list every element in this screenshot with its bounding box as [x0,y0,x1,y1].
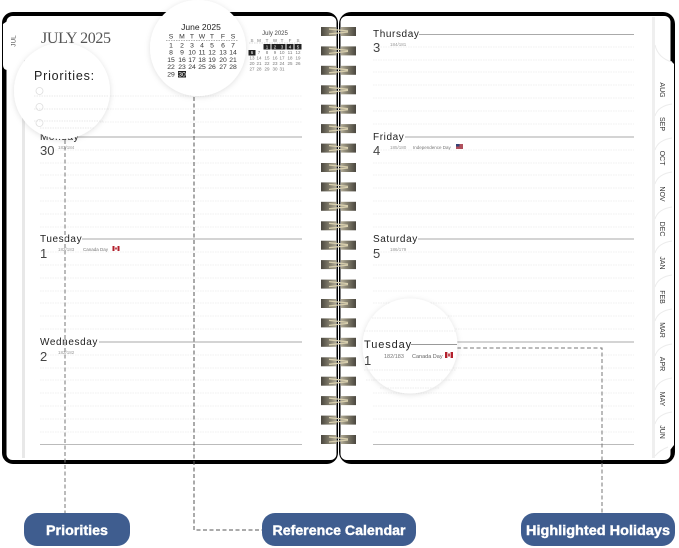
callout circle: June 2025 calendar: 8 [169,50,173,56]
day: Wednesday 2: 2 [40,349,47,364]
reference calendar: July 2025: 21 [256,61,262,66]
day: Friday 4: Friday [373,132,404,143]
label pill: Priorities [24,513,130,546]
month index tabs: APR [658,357,665,371]
reference calendar: July 2025: 15 [264,56,270,60]
callout circle: June 2025 calendar: 25 [198,64,206,71]
reference calendar: July 2025 [248,31,302,72]
month index tabs: DEC [658,222,665,236]
reference calendar: July 2025: 17 [279,56,285,60]
callout circle: June 2025 calendar: S [231,34,236,40]
connector: reference calendar [194,97,262,530]
callout circle: June 2025 calendar: W [199,34,206,40]
reference calendar: July 2025: 2 [274,44,277,50]
reference calendar: July 2025: 24 [279,61,285,66]
day: Monday 30: Monday [40,132,79,143]
day: Friday 4: 185/180 [390,145,407,150]
day: Tuesday 1: Tuesday [40,234,82,245]
day: Saturday 5: Saturday [373,234,418,245]
callout circle: June 2025 calendar: 12 [208,50,216,56]
day: Friday 4 [373,132,634,158]
day: Monday 30: 183/184 [58,145,75,150]
reference calendar: July 2025: T [281,38,284,43]
reference calendar: July 2025: 29 [264,66,270,72]
reference calendar: July 2025: M [257,38,261,43]
callout circle: June 2025 calendar: 7 [231,42,235,50]
reference calendar: July 2025: 16 [272,56,278,60]
reference calendar: July 2025: 11 [288,50,293,55]
callout circle: June 2025 calendar: 11 [198,50,206,56]
month index tabs: JAN [658,256,665,270]
callout circle: June 2025 calendar: 17 [188,57,196,64]
month tab: JUL [3,16,24,70]
callout circle: June 2025 calendar: 15 [167,57,175,64]
callout circle: June 2025 calendar: 22 [167,64,175,71]
reference calendar: July 2025: 18 [287,56,293,60]
ruled lines: left page [40,96,302,432]
day: Friday 4: 4 [373,143,380,158]
callout circle: June 2025 calendar: 9 [180,50,184,56]
callout circle: June 2025 calendar: 24 [188,64,196,71]
label pill: Priorities: Priorities [46,522,108,538]
day: Saturday 5: 5 [373,246,380,261]
callout circle: June 2025 calendar: F [221,34,225,40]
bottom rule: right page [373,444,634,446]
reference calendar: July 2025: 3 [281,44,284,50]
reference calendar: July 2025: 14 [256,56,262,60]
callout circle: June 2025 calendar: 27 [219,64,227,71]
callout circle: June 2025 calendar: 10 [188,50,196,56]
callout circle: priorities: Priorities: [34,69,95,83]
day: Tuesday 1: 1 [40,246,47,261]
month index tabs: MAY [658,392,665,407]
label pill: Reference Calendar: Reference Calendar [272,522,406,538]
month index tabs: SEP [658,117,665,131]
reference calendar: July 2025: 6 [251,50,254,55]
label pill: Highlighted Holidays: Highlighted Holidays [526,522,670,538]
month index tabs: AUG [658,82,665,98]
day: Tuesday 1 [40,234,302,261]
callout circle: June 2025 calendar: 16 [178,57,186,64]
callout circle: June 2025 calendar: 28 [229,64,237,71]
day: Wednesday 2 [40,337,302,364]
reference calendar: July 2025: 7 [258,50,261,55]
callout circle: June 2025 calendar: T [210,34,214,40]
left page [2,12,338,464]
callout circle: Canada Day holiday: 182/183 [384,354,404,360]
day: Saturday 5: 186/179 [390,247,407,252]
day: Thursday 3 [373,29,634,55]
reference calendar: July 2025: 25 [287,61,293,66]
day: Wednesday 2: Wednesday [40,337,98,348]
reference calendar: July 2025: 31 [279,66,285,72]
reference calendar: July 2025: 8 [266,50,269,55]
reference calendar: July 2025: F [289,38,292,43]
reference calendar: July 2025: 5 [297,44,300,50]
reference calendar: July 2025: 9 [274,50,277,55]
callout circle: Canada Day holiday [362,298,458,394]
callout circle: June 2025 calendar: 20 [219,57,227,64]
month index tabs: MAR [658,322,665,338]
reference calendar: July 2025: 19 [295,56,301,60]
callout circle: priorities [14,43,110,139]
callout circle: June 2025 calendar: 13 [219,50,227,56]
reference calendar: July 2025: 1 [266,44,269,50]
callout circle: June 2025 calendar: M [179,34,185,40]
callout circle: June 2025 calendar: T [190,34,194,40]
reference calendar: July 2025: W [273,38,278,43]
reference calendar: July 2025: 23 [272,61,278,66]
day rule: bottom right section [440,341,634,343]
label pill: Highlighted Holidays [521,513,675,546]
bottom rule: left page [40,444,302,446]
callout circle: June 2025 calendar: 29 [167,72,175,78]
connector: priorities [64,140,66,513]
connector: highlighted holidays [457,348,602,513]
ruled lines: right page [373,47,634,432]
reference calendar: July 2025: 12 [295,50,301,55]
day: Wednesday 2: 182/182 [58,350,75,355]
day: Tuesday 1: Canada Day [83,247,109,252]
callout circle: June 2025 calendar: June 2025 [181,22,221,32]
label pill: Reference Calendar [262,513,416,546]
callout circle: June 2025 calendar: 3 [190,42,194,50]
reference calendar: July 2025: S [296,38,300,43]
reference calendar: July 2025: 27 [249,66,255,72]
reference calendar: July 2025: T [266,38,269,43]
reference calendar: July 2025: 22 [264,61,270,66]
reference calendar: July 2025: 26 [295,61,301,66]
spiral binding [321,27,356,444]
day: Thursday 3: Thursday [373,29,420,40]
callout circle: June 2025 calendar: S [169,34,174,40]
day: Thursday 3: 184/181 [390,42,407,47]
right page [339,12,675,464]
callout circle: June 2025 calendar: 6 [221,42,225,50]
month index tabs: JUN [658,425,665,439]
callout circle: June 2025 calendar: 19 [208,57,216,64]
planner heading: JULY 2025: JULY 2025 [41,30,111,47]
reference calendar: July 2025: 28 [256,66,262,72]
month index tabs: OCT [658,151,665,166]
reference calendar: July 2025: 30 [272,66,278,72]
callout circle: June 2025 calendar: 2 [180,42,184,50]
callout circle: June 2025 calendar: 23 [178,64,186,71]
callout circle: June 2025 calendar [150,0,246,96]
reference calendar: July 2025: S [250,38,254,43]
month index tabs: FEB [658,290,665,304]
day: Monday 30: 30 [40,143,54,158]
reference calendar: July 2025: 13 [249,56,255,60]
day: Saturday 5 [373,234,634,261]
reference calendar: July 2025: July 2025 [262,31,289,37]
callout circle: June 2025 calendar: 26 [208,64,216,71]
month tab: JUL: JUL [10,35,18,47]
callout circle: June 2025 calendar: 1 [169,42,173,50]
day: Friday 4: Independence Day [413,145,452,150]
reference calendar: July 2025: 4 [289,44,292,50]
callout circle: June 2025 calendar: 4 [200,42,204,50]
day: Thursday 3: 3 [373,40,380,55]
month index tabs [655,45,674,458]
reference calendar: July 2025: 20 [249,61,255,66]
day: Tuesday 1: 182/183 [58,247,75,252]
callout circle: June 2025 calendar: 30 [178,72,186,78]
callout circle: Canada Day holiday: Canada Day [412,354,443,360]
month index tabs: NOV [658,186,665,202]
reference calendar: July 2025: 10 [279,50,285,55]
callout circle: June 2025 calendar: 21 [229,57,237,64]
day: Monday 30 [40,132,302,158]
callout circle: June 2025 calendar: 14 [229,50,237,56]
callout circle: Canada Day holiday: 1 [364,353,371,368]
callout circle: Canada Day holiday: Tuesday [364,339,412,351]
callout circle: June 2025 calendar: 18 [198,57,206,64]
callout circle: June 2025 calendar: 5 [210,42,214,50]
